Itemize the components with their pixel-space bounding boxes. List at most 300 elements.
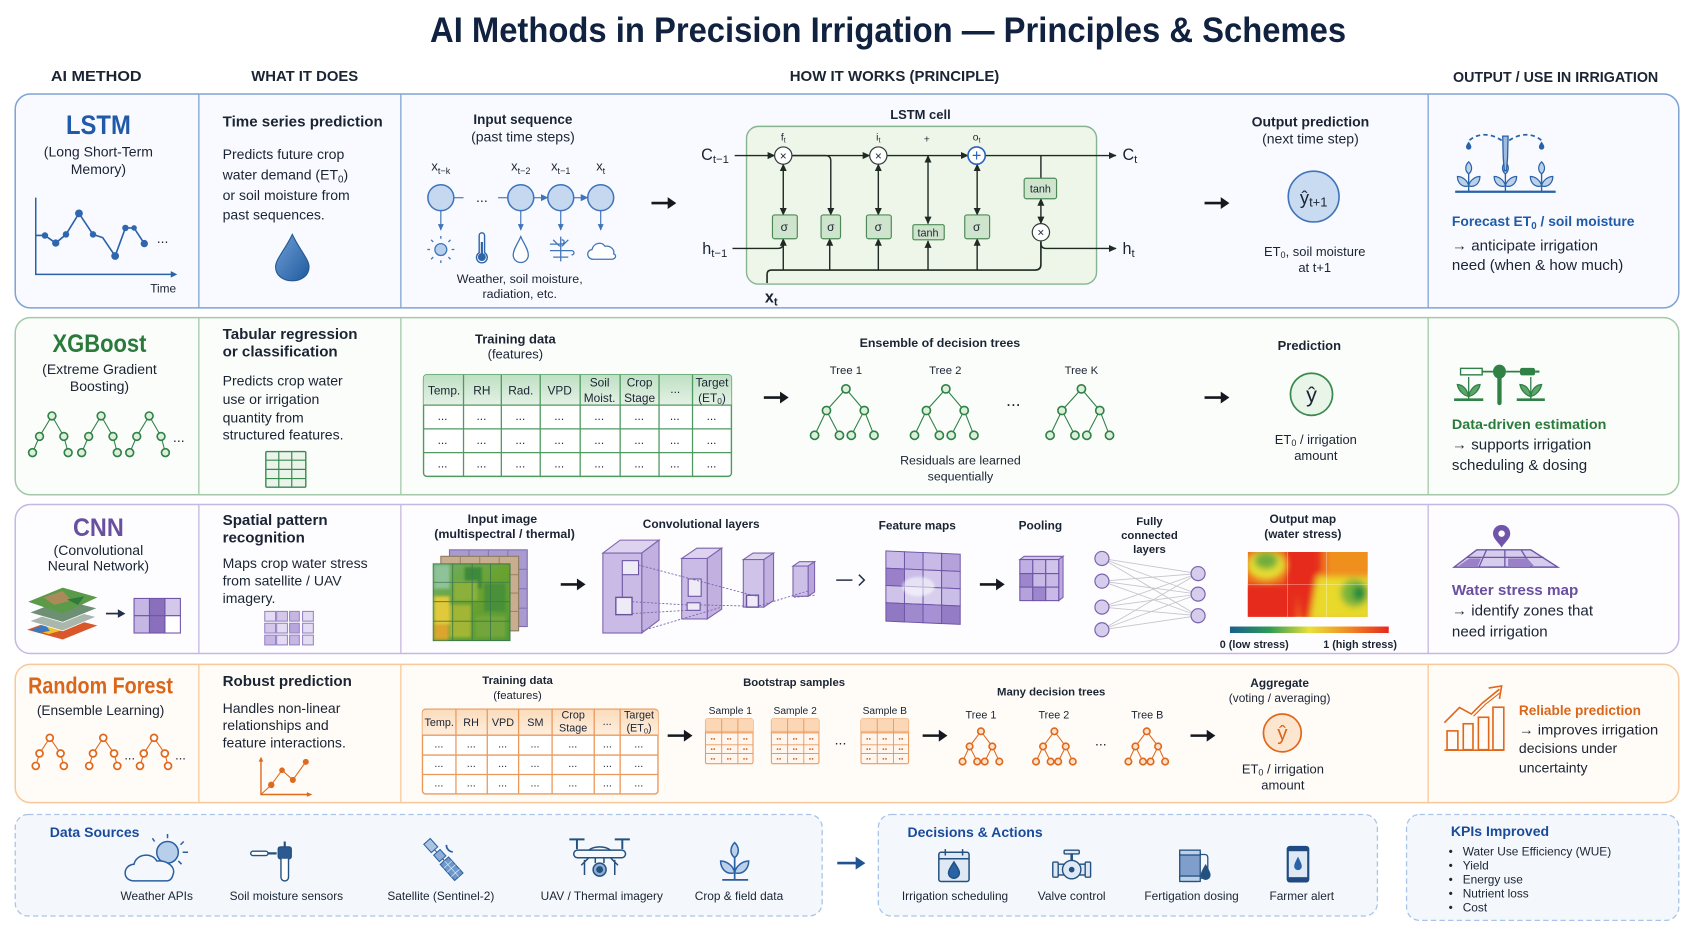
icon: cloud [588,243,616,259]
many decision trees: Tree 1 [966,709,996,721]
training data table: ... [554,433,564,447]
training data table: ... [707,409,716,423]
KPI list: • [1449,859,1453,873]
heading: decisions and actions: Decisions & Actions [907,824,1043,840]
training data table: Stage [624,391,656,405]
arrow [837,857,865,870]
what it does: XGBoost: Tabular regression [223,326,358,343]
LSTM cell diagram: σ [827,220,835,234]
convolutional layers [603,517,815,633]
arrow [668,730,693,742]
column headers: HOW IT WORKS (PRINCIPLE) [790,68,999,85]
training data table: (ET [698,391,717,405]
output text: CNN: Water stress map [1452,582,1578,599]
training data table: ... [568,777,577,789]
feature maps [879,518,960,624]
ensemble of decision trees: Tree 2 [929,365,961,377]
what it does: CNN: Maps crop water stress [223,555,368,571]
icon: satellite layer stack [27,588,97,639]
training data table: Target [695,376,729,390]
what it does: LSTM: Time series prediction [223,113,383,130]
input sequence diagram: t−k [438,166,451,176]
training data table: (ET [626,722,644,734]
output prediction: ŷ [1300,187,1309,208]
training data table: RH [463,717,479,729]
action labels: Fertigation dosing [1144,889,1239,903]
aggregate: amount [1261,778,1305,793]
LSTM cell diagram: h [702,240,711,258]
LSTM cell diagram: × [1037,226,1044,240]
dashed arrow [836,575,864,585]
aggregate [1229,676,1331,793]
training data table: Rad. [508,383,533,397]
training data table: ... [670,382,680,396]
icon: image grid [265,611,313,645]
training data table: ... [634,777,643,789]
arrow [561,578,586,590]
input sequence diagram: t−2 [518,166,530,176]
training data table: Crop [627,376,653,390]
training data table: ... [515,433,525,447]
input sequence diagram: Input sequence [473,112,573,127]
KPI list [1449,845,1611,915]
LSTM cell diagram: t [1134,154,1138,166]
training data table: ... [670,433,680,447]
what it does: CNN: Spatial pattern [223,512,328,529]
LSTM cell diagram: t [878,137,880,145]
output text: CNN [1452,582,1594,640]
training data table: ... [476,457,486,471]
LSTM cell diagram: C [1122,146,1134,164]
output text: XGBoost: scheduling & dosing [1452,457,1587,474]
icon: output grid [134,598,180,633]
icon: table [266,452,306,487]
output heat map [1220,512,1397,651]
method name: XGBoost: XGBoost [52,331,146,358]
panel: CNN row [15,504,1679,654]
LSTM cell diagram: + [972,147,981,165]
icon: map pin [1454,525,1558,567]
method subtitle: (Long Short-Term [44,144,153,160]
icon: rising bar chart [1444,686,1504,750]
input sequence diagram: x [551,159,558,174]
training data table: Training data [482,675,553,687]
KPI list: • [1449,873,1453,887]
fully connected layers [1095,516,1205,637]
what it does: Random Forest: relationships and [223,717,329,733]
training data table: ... [603,716,612,728]
input image stack [433,512,575,641]
LSTM cell diagram: × [875,149,882,163]
output text: XGBoost: → supports irrigation [1452,436,1591,453]
panel: LSTM row [15,94,1679,309]
source labels: UAV / Thermal imagery [541,889,663,903]
training data table: ... [438,457,447,471]
what it does: LSTM: ) [344,166,348,182]
training data table: ) [722,391,726,405]
training data table: Temp. [425,717,454,729]
column headers: OUTPUT / USE IN IRRIGATION [1453,69,1658,86]
method subtitle [42,361,157,394]
LSTM cell diagram: t−1 [711,248,727,260]
output text: LSTM: / soil moisture [1537,213,1635,229]
prediction [1275,338,1357,463]
training data table: SM [527,717,543,729]
KPI list: Water Use Efficiency (WUE) [1463,845,1611,859]
training data table: VPD [492,717,514,729]
icon: small forest trees: ... [175,747,186,762]
icon: crop plant [721,843,749,880]
icon: calendar [939,849,969,881]
output heat map: 0 (low stress) [1220,639,1289,651]
action labels: Valve control [1038,889,1106,903]
heading: KPIs improved: KPIs Improved [1451,823,1549,839]
training data table: ... [554,457,564,471]
what it does: LSTM: past sequences. [223,206,325,222]
training data table: Target [624,709,654,721]
LSTM cell diagram: t [1131,248,1135,260]
arrow [1205,197,1229,209]
icon: valve [1053,850,1091,879]
training data table: ... [515,409,525,423]
prediction: ET [1275,432,1291,447]
training data table: Crop [561,709,585,721]
icon: thermometer [476,233,487,263]
what it does: XGBoost [223,326,358,443]
bootstrap samples: Sample 1 [709,706,752,717]
panel: data sources [15,814,822,916]
aggregate: Aggregate [1250,676,1309,690]
bootstrap samples: Sample 2 [773,706,817,717]
LSTM cell diagram: LSTM cell [890,107,951,122]
LSTM cell diagram: t−1 [713,154,729,166]
fully connected layers: layers [1133,544,1166,556]
training data table: ... [634,457,644,471]
icon: water drop [276,234,309,281]
icon: probes and plants [1454,365,1545,405]
training data table: ... [476,433,486,447]
training data table: ... [498,739,507,751]
source labels: Crop & field data [695,889,784,903]
training data table: ... [634,739,643,751]
training data table: VPD [547,383,572,397]
what it does: CNN: recognition [223,529,305,546]
output prediction: Output prediction [1252,113,1369,129]
icon: satellite [423,833,468,880]
prediction: Prediction [1278,338,1341,353]
source labels: Satellite (Sentinel-2) [387,889,494,903]
column headers: AI METHOD [51,68,142,85]
aggregate: / irrigation [1263,761,1324,776]
LSTM cell diagram: + [924,135,930,146]
action labels: Farmer alert [1269,889,1335,903]
ensemble of decision trees: ... [1006,390,1021,410]
what it does: XGBoost: structured features. [223,427,344,443]
icon: small trees: ... [173,429,185,445]
input sequence diagram: ... [476,189,488,205]
ensemble of decision trees: Ensemble of decision trees [860,336,1020,350]
training data table: ) [648,722,652,734]
icon: small forest trees [32,734,186,769]
icon: sun [427,236,454,263]
LSTM cell diagram: tanh [918,228,939,240]
method subtitle: Memory) [71,161,126,177]
output text: Random Forest [1519,702,1658,775]
training data table: ... [707,457,716,471]
heading: data sources: Data Sources [50,824,140,840]
training data table: ... [603,758,612,770]
LSTM cell diagram: σ [875,220,883,234]
training data table: Moist. [584,391,615,405]
action labels: Irrigation scheduling [902,889,1008,903]
method name: CNN: CNN [73,515,124,542]
what it does: LSTM: Predicts future crop [223,146,344,162]
many decision trees: ... [1095,732,1107,748]
LSTM cell diagram: σ [781,220,789,234]
input sequence diagram: Weather, soil moisture, [457,272,583,286]
source labels [121,889,784,903]
input sequence diagram: t−1 [558,166,570,176]
training data table: ... [530,739,539,751]
training data table: Temp. [428,383,460,397]
what it does: CNN: from satellite / UAV [223,572,342,588]
training data table: (features) [493,690,542,702]
input image stack: Input image [468,512,537,526]
arrow [1191,730,1215,742]
method name: Random Forest: Random Forest [28,673,173,699]
method subtitle: (Convolutional [54,542,143,558]
arrow [1205,392,1229,403]
training data table: ... [594,457,604,471]
training data table: ... [515,457,525,471]
training data table: ... [634,433,644,447]
training data table: ... [498,758,507,770]
training data table: ... [634,758,643,770]
LSTM cell diagram: h [1122,240,1131,258]
ensemble of decision trees: Tree 1 [830,365,862,377]
training data table: ... [568,758,577,770]
input sequence diagram: x [511,159,518,174]
training data table: Training data [475,332,556,347]
LSTM cell diagram: × [780,149,787,163]
icon: sprinkler over plants [1455,135,1556,192]
method subtitle: (Extreme Gradient [42,361,157,377]
KPI list: • [1449,887,1453,901]
LSTM cell diagram: t [774,297,778,309]
prediction: / irrigation [1296,432,1357,447]
training data table: ... [467,758,476,770]
training data table: ... [670,409,680,423]
what it does: LSTM: water demand (ET [223,166,338,182]
chart: time series: Time [150,282,177,296]
training data table: ... [434,758,443,770]
aggregate: ŷ [1277,722,1288,745]
chart: time series [36,198,177,296]
training data table: ... [530,758,539,770]
KPI list: Energy use [1463,873,1523,887]
what it does: Random Forest: feature interactions. [223,735,346,751]
what it does: XGBoost: Predicts crop water [223,373,343,389]
method subtitle [44,144,153,177]
what it does: CNN [223,512,368,606]
output text: CNN: need irrigation [1452,623,1548,640]
panel: XGBoost row [15,318,1679,495]
pooling [1019,518,1063,601]
output text: LSTM: need (when & how much) [1452,257,1623,274]
output text: Random Forest: Reliable prediction [1519,702,1641,718]
bootstrap samples: Bootstrap samples [743,677,845,689]
arrow [651,197,676,209]
training data table: ... [438,433,447,447]
output heat map: 1 (high stress) [1323,639,1397,651]
bootstrap samples: ... [835,731,846,747]
what it does: XGBoost: use or irrigation [223,391,319,407]
panel: Random Forest row [15,664,1679,803]
output text: Random Forest: decisions under [1519,740,1618,756]
LSTM cell diagram: t [784,137,786,145]
ensemble of decision trees: sequentially [928,470,994,484]
KPI list: Yield [1463,859,1489,873]
icon: scatter trend [259,757,312,797]
icon: small trees [29,412,185,457]
training data table: ... [603,777,612,789]
aggregate: ET [1242,761,1258,776]
training data table [422,675,658,794]
LSTM cell diagram: C [701,146,713,164]
icon: drone [569,839,630,876]
output prediction: 0 [1281,250,1286,260]
method subtitle: Neural Network) [48,557,149,573]
KPI list: • [1449,845,1453,859]
training data table: ... [594,433,604,447]
arrow [106,609,125,618]
output text: LSTM: 0 [1531,221,1537,232]
training data table: ... [438,409,447,423]
training data table: (features) [488,347,543,362]
method name: LSTM: LSTM [66,110,131,140]
output text: LSTM: Forecast ET [1452,213,1532,229]
fully connected layers: connected [1121,530,1178,542]
training data table: 0 [717,396,722,406]
many decision trees: Tree B [1131,709,1163,721]
what it does: CNN: imagery. [223,590,275,606]
what it does: LSTM [222,113,383,222]
output text: LSTM [1452,213,1635,274]
output text: XGBoost: Data-driven estimation [1452,416,1606,432]
training data table: 0 [644,726,648,735]
training data table: ... [603,739,612,751]
method subtitle: Boosting) [70,378,129,394]
KPI list: • [1449,901,1453,915]
ensemble of decision trees [810,336,1114,484]
input sequence diagram: x [431,159,438,174]
output text: LSTM: → anticipate irrigation [1452,238,1598,255]
training data table: ... [467,777,476,789]
training data table: ... [434,739,443,751]
icon: fertigation tank [1180,850,1210,881]
training data table: ... [554,409,564,423]
training data table [424,332,731,476]
LSTM cell diagram [701,107,1138,309]
arrow [980,578,1005,590]
arrow [923,730,947,742]
column headers [51,68,1658,86]
what it does: Random Forest: Robust prediction [223,673,352,690]
fully connected layers: Fully [1136,516,1163,528]
training data table: Soil [590,376,610,390]
training data table: ... [634,409,644,423]
training data table: ... [530,777,539,789]
icon: wind [550,237,574,261]
KPI list: Cost [1463,901,1488,915]
KPI list: Nutrient loss [1463,887,1529,901]
many decision trees: Many decision trees [997,687,1105,699]
output text: Random Forest: uncertainty [1519,759,1588,775]
training data table: ... [467,739,476,751]
aggregate: (voting / averaging) [1229,691,1331,705]
icon: phone [1287,846,1309,883]
LSTM cell diagram: f [781,132,784,143]
column headers: WHAT IT DOES [251,68,358,85]
LSTM cell diagram: t [978,137,980,145]
what it does: XGBoost: or classification [223,343,338,360]
icon: moisture drop [513,237,528,262]
output prediction: ET [1264,244,1281,259]
many decision trees [959,687,1168,765]
icon: soil sensor [251,842,291,881]
output text: Random Forest: → improves irrigation [1519,722,1658,738]
panel: KPIs [1407,814,1679,920]
LSTM cell diagram: σ [973,220,981,234]
training data table: ... [670,457,680,471]
arrow [764,392,789,403]
method subtitle [48,542,149,573]
LSTM cell diagram: tanh [1030,183,1051,195]
source labels: Weather APIs [121,889,193,903]
training data table: Stage [559,722,587,734]
bootstrap samples [705,677,909,764]
output prediction: t+1 [1309,194,1327,209]
icon: weather [125,834,188,881]
prediction: 0 [1291,438,1296,448]
what it does: Random Forest [223,673,352,751]
training data table: ... [707,433,716,447]
LSTM cell diagram: i [876,132,878,143]
training data table: ... [568,739,577,751]
icon: small forest trees: ... [124,747,135,762]
convolutional layers: Convolutional layers [643,517,760,531]
bootstrap samples: Sample B [863,706,907,717]
input sequence diagram: x [596,159,603,174]
input sequence diagram: (past time steps) [471,129,575,145]
ensemble of decision trees: Tree K [1065,365,1099,377]
input sequence diagram: radiation, etc. [482,287,557,301]
what it does: Random Forest: Handles non-linear [223,700,341,716]
what it does: XGBoost: quantity from [223,409,304,425]
prediction: ŷ [1306,382,1317,407]
chart: time series: ... [157,230,168,246]
method subtitle: (Ensemble Learning) [37,702,164,718]
training data table: ... [594,409,604,423]
output text: CNN: → identify zones that [1452,603,1594,620]
training data table: RH [473,383,490,397]
output prediction: (next time step) [1262,131,1359,147]
input image stack: (multispectral / thermal) [434,527,575,541]
LSTM cell diagram: x [765,288,774,306]
input sequence diagram [427,112,616,301]
feature maps: Feature maps [879,518,956,532]
source labels: Soil moisture sensors [230,889,343,903]
